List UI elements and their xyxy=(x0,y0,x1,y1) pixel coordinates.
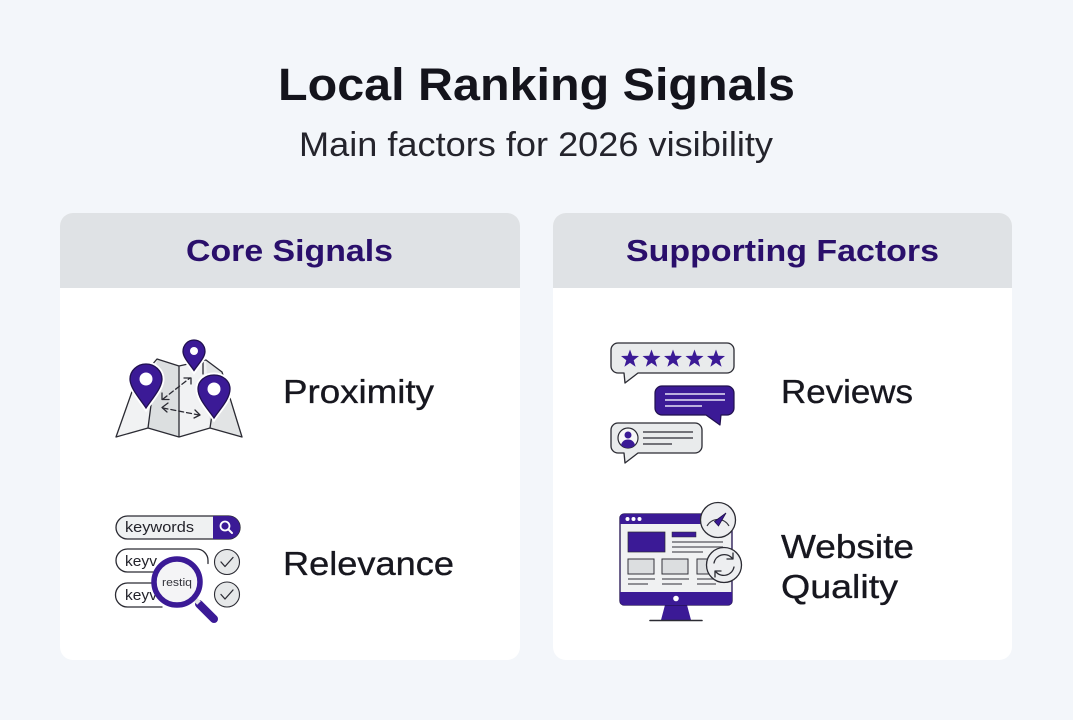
icon: review bubbles xyxy=(611,343,734,463)
label: website quality xyxy=(781,528,914,605)
heading: supporting factors: Supporting Factors xyxy=(626,233,939,268)
label: relevance: Relevance xyxy=(283,545,454,582)
panel background xyxy=(60,213,520,660)
label: reviews: Reviews xyxy=(781,373,913,410)
panel background xyxy=(553,213,1012,660)
panel: supporting factors xyxy=(553,213,1012,660)
icon: map with pins xyxy=(116,340,242,437)
label: website quality: Website xyxy=(781,528,914,565)
heading: core signals: Core Signals xyxy=(186,233,393,268)
subtitle: Main factors for 2026 visibility xyxy=(299,126,773,164)
label: proximity: Proximity xyxy=(283,373,435,410)
panel header band xyxy=(60,213,520,288)
panel: core signals xyxy=(60,213,520,660)
icon: keyword search: restiq xyxy=(162,577,192,589)
panel header band xyxy=(553,213,1012,288)
icon: website monitor xyxy=(620,502,742,620)
label: website quality: Quality xyxy=(781,568,899,605)
icon: keyword search: keywords xyxy=(125,520,194,536)
title: Local Ranking Signals xyxy=(278,59,795,110)
icon: keyword search xyxy=(116,516,240,619)
icon: keyword search: keyv xyxy=(125,554,158,570)
icon: keyword search: keyv xyxy=(125,588,158,604)
